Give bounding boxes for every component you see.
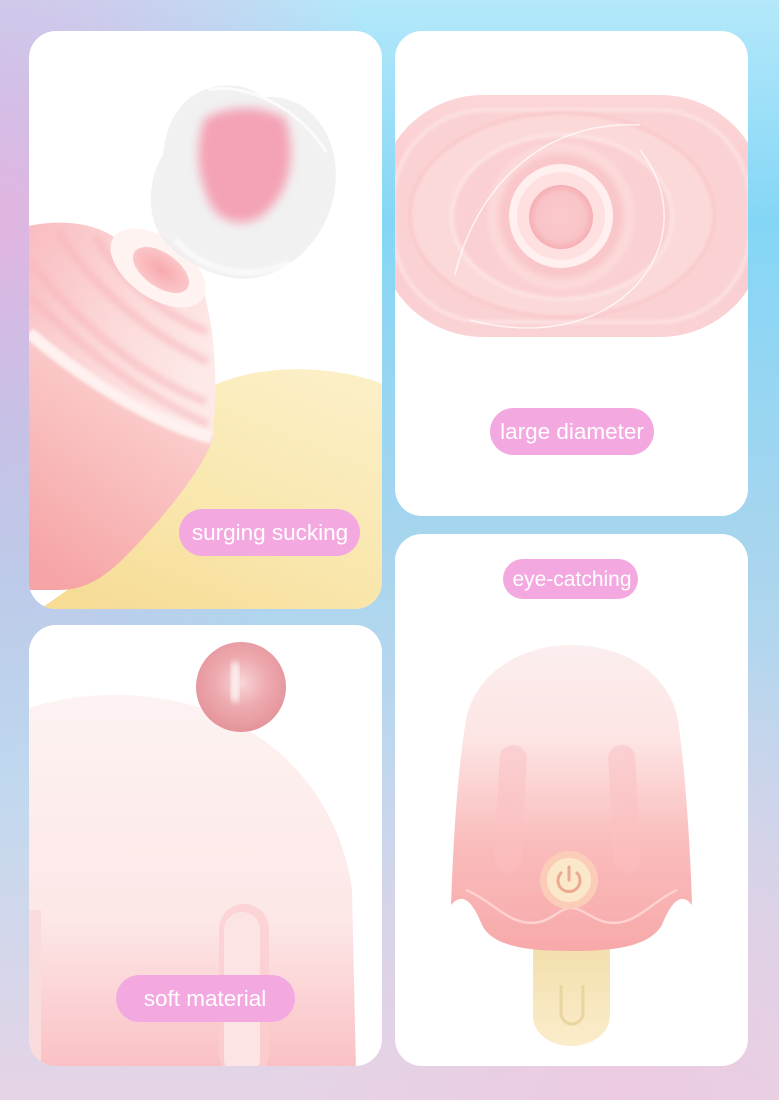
panel: soft material — [29, 625, 382, 1079]
illustration: pink device — [29, 212, 219, 590]
illustration: ridge right — [608, 744, 641, 874]
label: surging sucking: surging sucking — [192, 520, 348, 545]
illustration: centre ring — [499, 154, 623, 278]
panel: surging sucking — [29, 31, 385, 612]
panel: large diameter — [378, 31, 765, 516]
label: large diameter — [490, 408, 654, 455]
illustration: yellow mound — [35, 369, 385, 612]
label: surging sucking — [179, 509, 360, 556]
illustration: oval top view — [378, 95, 765, 337]
illustration: ridge left — [494, 744, 527, 874]
label: soft material: soft material — [144, 986, 266, 1011]
illustration: transparent cap — [151, 85, 336, 279]
label: large diameter: large diameter — [500, 419, 644, 444]
illustration: stick — [533, 945, 610, 1046]
illustration: round ball — [196, 642, 286, 732]
panel: eye-catching — [395, 534, 748, 1066]
icon: power button — [540, 851, 598, 909]
label: eye-catching: eye-catching — [512, 568, 632, 591]
label: soft material — [116, 975, 295, 1022]
illustration: close-up body — [29, 695, 356, 1079]
illustration: front body — [451, 645, 692, 951]
label: eye-catching — [503, 559, 638, 599]
